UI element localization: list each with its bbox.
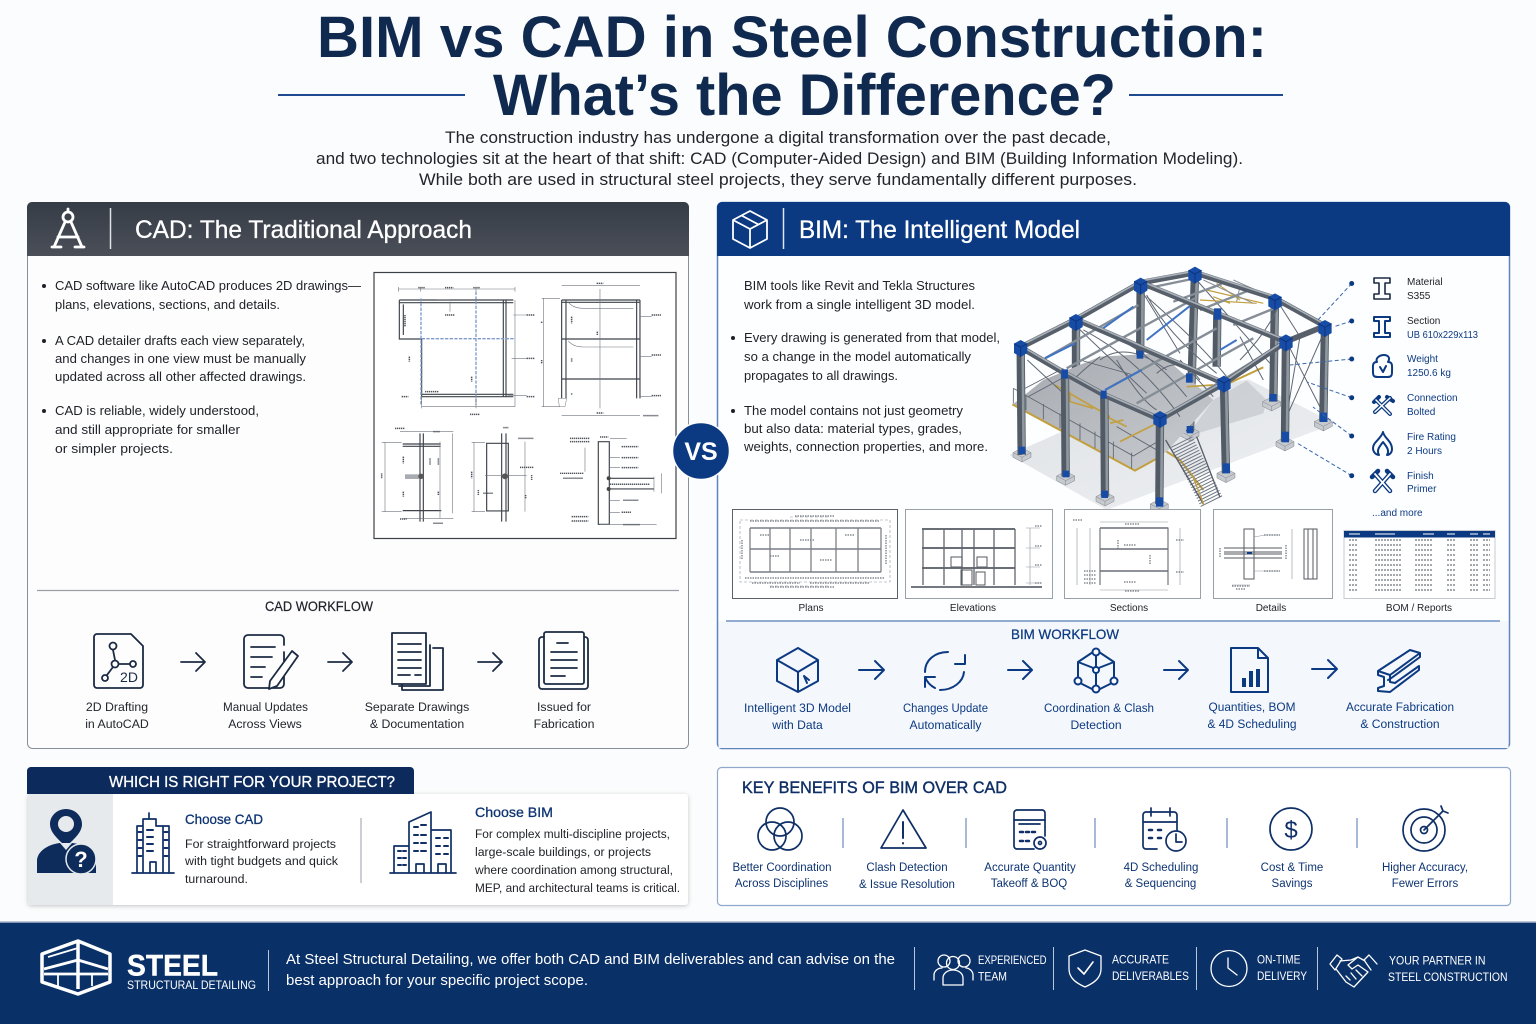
badge: experienced team: EXPERIENCED xyxy=(978,954,1046,967)
VS badge: VS xyxy=(684,438,718,466)
benefit labels: Takeoff & BOQ xyxy=(991,878,1067,890)
BIM header bar xyxy=(717,202,1510,256)
workflow labels: & 4D Scheduling xyxy=(1208,717,1296,731)
spec labels: ...and more xyxy=(1372,508,1423,519)
CAD workflow: CAD WORKFLOW xyxy=(265,598,374,614)
badge: on-time delivery xyxy=(1211,950,1307,986)
icon: 2D drafting xyxy=(94,634,143,688)
spec labels: 1250.6 kg xyxy=(1407,368,1451,379)
spec labels: Connection xyxy=(1407,393,1458,404)
thumbnail: plans: Plans xyxy=(798,603,824,614)
spec labels: Bolted xyxy=(1407,407,1435,418)
badge: on-time delivery: DELIVERY xyxy=(1257,970,1307,983)
section tab xyxy=(27,767,414,794)
choose BIM: MEP, and architectural teams is critical. xyxy=(475,881,680,895)
icon: section xyxy=(1374,317,1390,337)
icon: calendar clock xyxy=(1143,808,1186,851)
CAD header bar: CAD: The Traditional Approach xyxy=(135,216,472,244)
CAD bullets: and still appropriate for smaller xyxy=(55,422,241,437)
CAD workflow: 2D xyxy=(120,669,138,685)
icon: compass xyxy=(52,209,84,247)
VS badge xyxy=(672,422,730,480)
icon: coordination xyxy=(1078,650,1114,691)
staircase xyxy=(1166,437,1220,505)
spec labels: Section xyxy=(1407,316,1440,327)
choose CAD: turnaround. xyxy=(185,872,248,886)
spec labels: Fire Rating xyxy=(1407,432,1456,443)
panel: BIM xyxy=(717,202,1510,748)
choose BIM: Choose BIM xyxy=(475,804,553,820)
roof bracing xyxy=(1027,280,1325,417)
purlins xyxy=(1045,278,1287,415)
section tab: WHICH IS RIGHT FOR YOUR PROJECT? xyxy=(109,774,395,791)
thumbnail: details: Details xyxy=(1256,603,1286,614)
logo: STRUCTURAL DETAILING xyxy=(127,980,256,992)
spec labels: UB 610x229x113 xyxy=(1407,330,1478,341)
spec labels: Primer xyxy=(1407,484,1437,495)
intro text xyxy=(316,128,1243,189)
icon: warning triangle xyxy=(881,810,926,848)
workflow labels: Changes Update xyxy=(903,701,988,715)
thumbnail: sections xyxy=(1064,510,1200,614)
BIM header bar: BIM: The Intelligent Model xyxy=(799,216,1080,244)
BIM bullets: but also data: material types, grades, xyxy=(744,421,962,436)
workflow labels: Automatically xyxy=(910,718,982,732)
choose BIM xyxy=(390,804,680,895)
footer band xyxy=(0,922,1536,1024)
workflow labels: & Documentation xyxy=(370,717,464,731)
CAD bullets: A CAD detailer drafts each view separately, xyxy=(55,333,305,348)
workflow labels: Detection xyxy=(1070,718,1122,732)
workflow labels: Manual Updates xyxy=(223,700,308,714)
workflow labels: Coordination & Clash xyxy=(1044,701,1154,715)
benefit labels: Savings xyxy=(1272,878,1313,890)
arrows xyxy=(859,660,1337,679)
BIM bullets xyxy=(731,278,1000,454)
choose CAD xyxy=(132,811,339,886)
icon: quantities xyxy=(1231,648,1268,692)
intro text: and two technologies sit at the heart of that shift: CAD (Computer-Aided Design) and BIM (Building Information Modeling). xyxy=(316,149,1243,168)
footer message: best approach for your specific project scope. xyxy=(286,972,588,989)
choose BIM: where coordination among structural, xyxy=(474,863,673,877)
rear columns xyxy=(1076,273,1277,432)
workflow labels: Issued for xyxy=(537,700,591,714)
benefit labels: Better Coordination xyxy=(732,862,832,874)
badge: accurate deliverables: DELIVERABLES xyxy=(1112,970,1189,983)
badge: partner: STEEL CONSTRUCTION xyxy=(1388,971,1508,984)
elevation view xyxy=(562,300,640,398)
BIM bullets: weights, connection properties, and more. xyxy=(743,439,988,454)
thumbnail: BOM table: BOM / Reports xyxy=(1386,603,1452,614)
BIM bullets: so a change in the model automatically xyxy=(744,349,972,364)
icon: city buildings xyxy=(390,812,456,873)
choose CAD: Choose CAD xyxy=(185,811,263,827)
choose BIM: For complex multi-discipline projects, xyxy=(475,827,670,841)
mezzanine floor xyxy=(1012,353,1263,490)
BIM bullets: Every drawing is generated from that model, xyxy=(744,330,1000,345)
intro text: While both are used in structural steel projects, they serve fundamentally different purposes. xyxy=(419,170,1137,189)
workflow labels: 2D Drafting xyxy=(86,700,148,714)
3D steel structure model xyxy=(1009,267,1335,513)
footer message: At Steel Structural Detailing, we offer both CAD and BIM deliverables and can advise on the xyxy=(286,951,895,968)
icon: calculator xyxy=(1014,810,1046,849)
icon: 3D model xyxy=(777,648,818,692)
spec labels: Material xyxy=(1407,277,1443,288)
thumbnail: elevations: Elevations xyxy=(950,603,996,614)
workflow labels: Quantities, BOM xyxy=(1208,700,1296,714)
badge: on-time delivery: ON-TIME xyxy=(1257,954,1301,966)
benefit labels: Across Disciplines xyxy=(735,878,828,890)
CAD bullets: plans, elevations, sections, and details. xyxy=(55,297,280,312)
primary beams xyxy=(1021,271,1325,419)
icon: cube xyxy=(733,211,767,248)
arrows xyxy=(181,653,502,671)
icon: dollar xyxy=(1270,808,1312,850)
connection detail xyxy=(598,442,654,524)
icon: target xyxy=(1403,806,1448,851)
model callout leaders xyxy=(1290,284,1352,476)
CAD bullets: and changes in one view must be manually xyxy=(55,351,307,366)
BIM workflow background xyxy=(718,621,1508,748)
model data list xyxy=(1372,277,1478,519)
drawing thumbnails xyxy=(732,510,1495,614)
front columns xyxy=(1021,327,1327,504)
icon: separate drawings xyxy=(392,633,443,690)
title xyxy=(278,5,1283,128)
CAD bullets: or simpler projects. xyxy=(55,441,173,456)
CAD bullets: updated across all other affected drawings. xyxy=(55,369,306,384)
benefit labels: & Issue Resolution xyxy=(859,879,955,891)
panel: key benefits xyxy=(718,768,1510,906)
ground slab xyxy=(1009,379,1335,510)
thumbnail: plans xyxy=(732,510,898,614)
workflow labels: Fabrication xyxy=(534,717,595,731)
icon: tower xyxy=(132,813,174,873)
panel: CAD xyxy=(27,202,689,748)
BIM workflow: BIM WORKFLOW xyxy=(1011,626,1120,642)
question sidebar xyxy=(28,794,113,905)
section view A xyxy=(403,433,441,522)
workflow labels: Accurate Fabrication xyxy=(1346,700,1454,714)
icon: sync xyxy=(925,652,965,690)
workflow labels: & Construction xyxy=(1360,717,1440,731)
intro text: The construction industry has undergone a digital transformation over the past decade, xyxy=(445,128,1111,147)
workflow labels: Intelligent 3D Model xyxy=(744,701,851,715)
icon: fire xyxy=(1373,432,1392,455)
benefit labels: Cost & Time xyxy=(1261,862,1323,874)
choose CAD: For straightforward projects xyxy=(185,837,336,851)
icon: I-beam xyxy=(1378,650,1420,692)
benefit labels: Higher Accuracy, xyxy=(1382,862,1468,874)
icon: material xyxy=(1374,278,1390,299)
benefit labels: Clash Detection xyxy=(866,862,948,874)
panel: key benefits: KEY BENEFITS OF BIM OVER CAD xyxy=(742,778,1007,797)
benefit labels xyxy=(732,862,1468,891)
benefit labels: Fewer Errors xyxy=(1392,878,1458,890)
spec labels: Weight xyxy=(1407,354,1438,365)
workflow labels: with Data xyxy=(771,718,823,732)
spec labels xyxy=(1372,277,1478,519)
CAD header bar xyxy=(27,202,689,256)
spec labels: S355 xyxy=(1407,291,1431,302)
panel: key benefits: $ xyxy=(1284,817,1298,844)
logo xyxy=(42,941,256,994)
icon: issued for fabrication xyxy=(539,632,588,689)
BIM bullets: The model contains not just geometry xyxy=(744,403,964,418)
BIM bullets: work from a single intelligent 3D model. xyxy=(743,297,975,312)
BIM bullets: BIM tools like Revit and Tekla Structures xyxy=(744,278,975,293)
workflow labels xyxy=(744,700,1454,732)
badge: partner xyxy=(1330,954,1508,987)
title: What’s the Difference? xyxy=(493,63,1116,128)
benefit labels: 4D Scheduling xyxy=(1124,862,1198,874)
callout dots xyxy=(1349,281,1354,478)
thumbnail: BOM table xyxy=(1344,530,1495,614)
blue connection plates xyxy=(1014,267,1332,507)
thumbnail: details xyxy=(1214,510,1332,614)
spec labels: 2 Hours xyxy=(1407,446,1442,457)
choose BIM: large-scale buildings, or projects xyxy=(475,845,651,859)
panel: which is right for your project xyxy=(27,767,688,905)
footings xyxy=(1013,397,1332,513)
badge: accurate deliverables xyxy=(1069,950,1189,987)
CAD bullets xyxy=(42,278,361,456)
workflow labels: Across Views xyxy=(228,717,302,731)
CAD bullets: CAD is reliable, widely understood, xyxy=(55,403,259,418)
badge: experienced team xyxy=(934,954,1046,985)
icon: coordination circles xyxy=(758,808,802,850)
thumbnail: sections: Sections xyxy=(1110,603,1148,614)
benefit labels: Accurate Quantity xyxy=(984,862,1076,874)
plan view xyxy=(399,300,513,397)
BIM bullets: propagates to all drawings. xyxy=(744,368,898,383)
choose CAD: with tight budgets and quick xyxy=(184,854,339,868)
BIM workflow xyxy=(744,626,1454,732)
spec labels: Finish xyxy=(1407,471,1434,482)
CAD workflow xyxy=(85,598,595,731)
logo: STEEL xyxy=(127,950,218,982)
badge: partner: YOUR PARTNER IN xyxy=(1389,954,1486,968)
badge: experienced team: TEAM xyxy=(978,970,1007,984)
icon: weight xyxy=(1373,355,1392,377)
badge: accurate deliverables: ACCURATE xyxy=(1112,954,1169,966)
section view B xyxy=(487,433,508,522)
benefit labels: & Sequencing xyxy=(1125,878,1196,890)
CAD bullets: CAD software like AutoCAD produces 2D drawings— xyxy=(55,278,361,293)
CAD 2D drawing sheet xyxy=(374,272,676,538)
workflow labels: in AutoCAD xyxy=(85,717,149,731)
icon: manual updates xyxy=(244,635,298,689)
icon: finish xyxy=(1372,471,1393,491)
icon: connection xyxy=(1374,397,1393,414)
thumbnail: elevations xyxy=(906,510,1052,614)
workflow labels xyxy=(85,700,595,731)
workflow labels: Separate Drawings xyxy=(365,700,469,714)
title: BIM vs CAD in Steel Construction: xyxy=(317,5,1267,70)
icon: person with question mark: ? xyxy=(74,847,88,872)
footer message xyxy=(286,951,895,989)
